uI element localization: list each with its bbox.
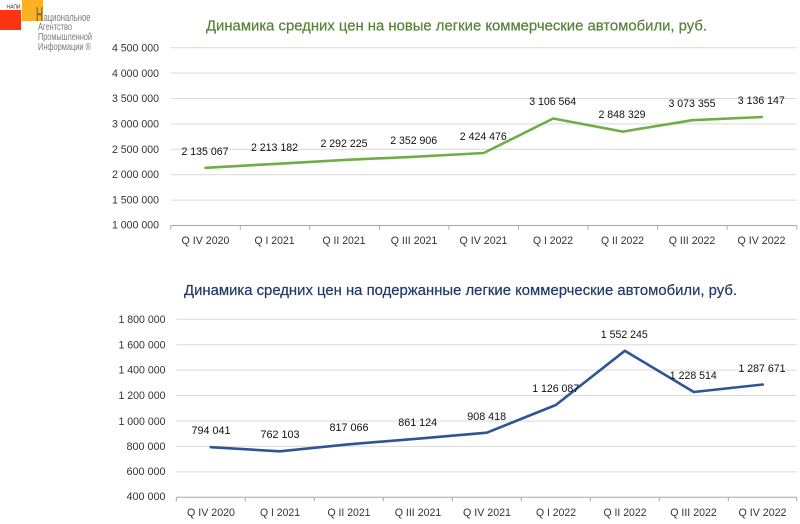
data labels: 1 228 514 — [670, 370, 717, 382]
y axis labels: 1 400 000 — [118, 364, 166, 376]
logo: orange square — [22, 0, 43, 21]
y axis labels: 1 800 000 — [118, 314, 166, 326]
x axis labels: Q I 2021 — [254, 235, 294, 247]
logo: agency name: Агентство — [38, 21, 72, 33]
logo: small abbreviation: НАПИ — [6, 4, 21, 10]
y axis labels: 400 000 — [126, 491, 166, 503]
y axis labels: 3 000 000 — [112, 118, 159, 130]
data labels — [192, 329, 786, 441]
data labels: 2 292 225 — [320, 138, 368, 150]
y axis labels: 800 000 — [126, 441, 166, 453]
x axis labels: Q IV 2021 — [463, 507, 511, 519]
title: new vehicles chart: Динамика средних цен на новые легкие коммерческие автомобили, руб. — [206, 18, 707, 34]
logo: agency name: Промышленной — [38, 31, 92, 43]
x axis labels: Q III 2022 — [669, 235, 715, 247]
x axis labels: Q I 2022 — [533, 235, 573, 247]
y axis labels: 2 000 000 — [112, 169, 159, 181]
data labels: 2 213 182 — [251, 142, 298, 154]
y axis labels: 1 200 000 — [118, 390, 166, 402]
data labels: 3 136 147 — [738, 95, 785, 107]
data labels: 817 066 — [330, 422, 368, 434]
data labels: 2 848 329 — [598, 109, 646, 121]
logo: agency name: ациональное — [44, 12, 90, 24]
logo: red square — [0, 10, 21, 30]
x axis labels: Q IV 2022 — [738, 507, 786, 519]
x axis labels: Q III 2022 — [670, 507, 717, 519]
y axis labels: 1 000 000 — [118, 416, 166, 428]
y axis labels: 1 000 000 — [112, 220, 159, 232]
x axis labels: Q I 2022 — [536, 507, 576, 519]
x axis labels: Q III 2021 — [395, 507, 441, 519]
y axis labels: 1 500 000 — [112, 194, 159, 206]
y axis labels: 1 600 000 — [118, 340, 166, 352]
data labels: 1 552 245 — [601, 329, 648, 341]
logo: agency name: Информации ® — [38, 41, 91, 53]
x axis labels: Q II 2022 — [604, 507, 646, 519]
data labels: 908 418 — [467, 411, 506, 423]
data labels: 1 287 671 — [738, 363, 786, 375]
data labels: 794 041 — [192, 425, 230, 437]
x axis labels — [182, 235, 786, 247]
title: used vehicles chart: Динамика средних цен на подержанные легкие коммерческие автомобили, руб. — [184, 283, 737, 299]
y axis labels — [112, 42, 159, 232]
data labels: 2 424 476 — [460, 131, 507, 143]
data labels: 2 135 067 — [182, 146, 228, 158]
x axis labels — [187, 507, 786, 519]
line chart: used vehicles — [118, 314, 797, 519]
x axis labels: Q II 2021 — [322, 235, 366, 247]
x axis labels: Q II 2022 — [601, 235, 644, 247]
line chart: new vehicles — [112, 42, 797, 247]
y axis labels: 4 000 000 — [112, 68, 159, 80]
data labels: 861 124 — [398, 417, 437, 429]
x axis labels: Q IV 2021 — [460, 235, 508, 247]
x axis labels: Q IV 2022 — [738, 235, 786, 247]
logo: agency name — [36, 4, 92, 53]
data labels: 762 103 — [260, 429, 300, 441]
y axis labels: 3 500 000 — [112, 93, 159, 105]
x axis labels: Q III 2021 — [391, 235, 437, 247]
logo: National Agency of Industrial Information — [0, 0, 92, 53]
y axis labels: 2 500 000 — [112, 144, 159, 156]
x axis labels: Q IV 2020 — [182, 235, 230, 247]
x axis labels: Q IV 2020 — [187, 507, 235, 519]
x axis labels: Q I 2021 — [260, 507, 300, 519]
data labels: 3 106 564 — [529, 96, 576, 108]
x axis labels: Q II 2021 — [328, 507, 370, 519]
y axis labels: 4 500 000 — [112, 42, 159, 54]
data labels — [182, 95, 785, 158]
logo: agency name: Н — [36, 4, 43, 26]
data labels: 3 073 355 — [668, 98, 716, 110]
data line: blue — [211, 351, 763, 451]
y axis labels: 600 000 — [126, 466, 166, 478]
data labels: 2 352 906 — [390, 135, 437, 147]
y axis labels — [118, 314, 166, 503]
data labels: 1 126 087 — [532, 383, 579, 395]
data line: green — [206, 117, 762, 168]
